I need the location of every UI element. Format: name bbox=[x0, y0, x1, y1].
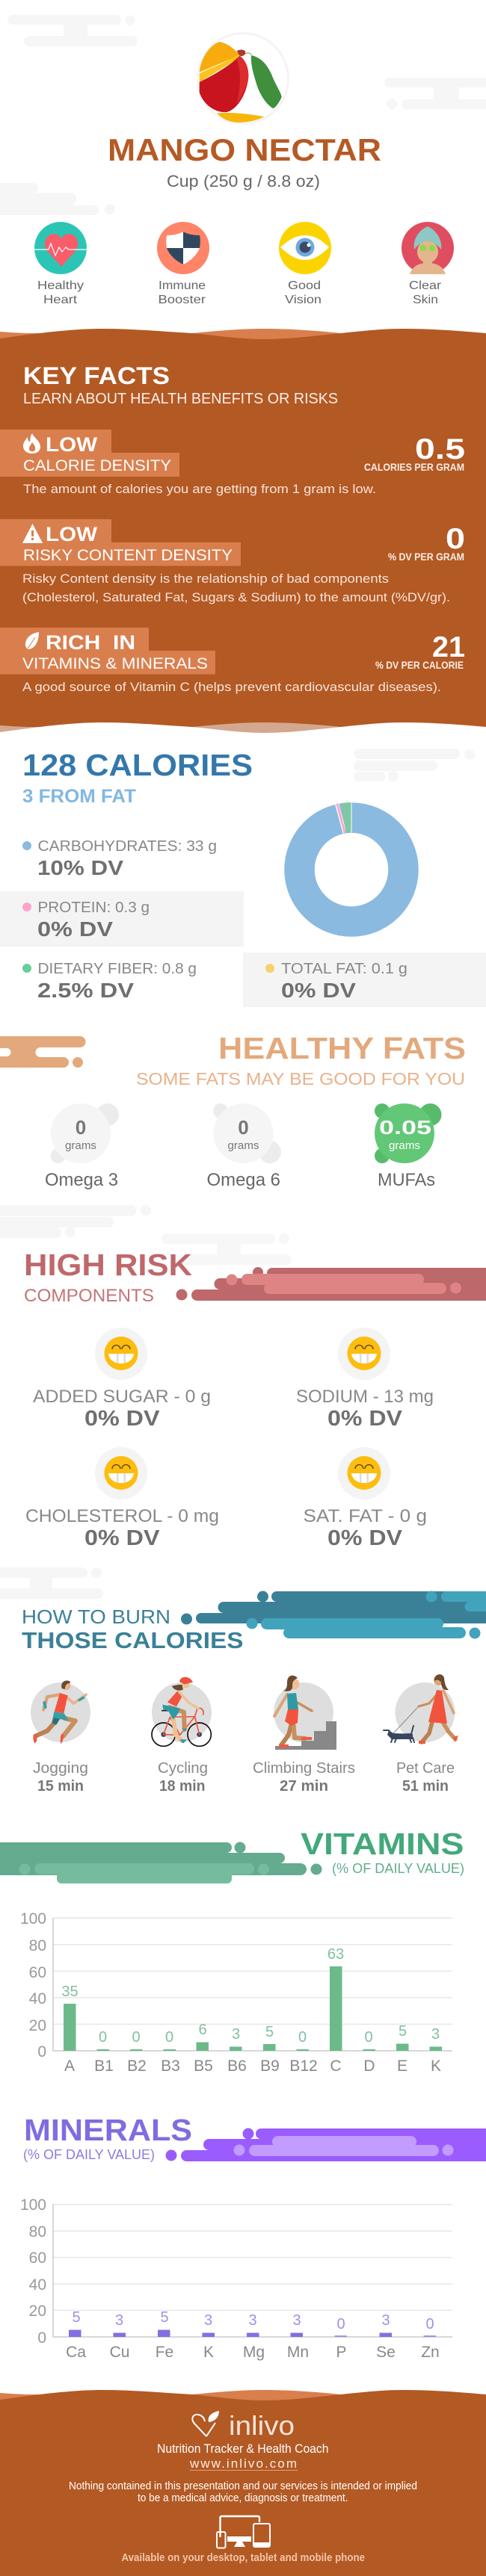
decoration: risk banner bbox=[176, 1267, 486, 1301]
panel: header bbox=[0, 15, 486, 306]
icon: mango bbox=[197, 33, 289, 124]
decoration: minerals banner bbox=[166, 2128, 486, 2161]
y axis labels bbox=[20, 2196, 46, 2347]
heading: minerals: MINERALS bbox=[24, 2113, 192, 2147]
icon: good vision bbox=[279, 222, 331, 274]
fat: omega 6 bbox=[206, 1103, 281, 1190]
subheading: vitamins: (% OF DAILY VALUE) bbox=[332, 1861, 464, 1876]
subheading: minerals: (% OF DAILY VALUE) bbox=[23, 2147, 155, 2162]
risk item: cholesterol: CHOLESTEROL - 0 mg bbox=[25, 1506, 219, 1526]
legend: total fat: 0% DV bbox=[281, 979, 356, 1002]
y axis labels: 100 bbox=[20, 1910, 46, 1928]
legend: dietary fiber: 2.5% DV bbox=[37, 979, 134, 1002]
fact: risky content density bbox=[0, 519, 465, 604]
x axis labels: B3 bbox=[161, 2058, 180, 2075]
fat: mufas: MUFAs bbox=[378, 1170, 435, 1190]
website: www.inlivo.com bbox=[189, 2456, 297, 2471]
value labels: 3 bbox=[115, 2312, 123, 2329]
heading: high risk: HIGH RISK bbox=[24, 1248, 192, 1282]
activity: climbing stairs: 27 min bbox=[280, 1778, 328, 1795]
panel: vitamins bbox=[0, 1827, 464, 2075]
description bbox=[22, 572, 450, 604]
y axis labels: 20 bbox=[29, 2303, 46, 2320]
value labels: 5 bbox=[399, 2023, 407, 2040]
x axis labels: Ca bbox=[66, 2344, 86, 2361]
legend: protein bbox=[0, 891, 244, 947]
legend: total fat bbox=[243, 953, 486, 1007]
description: The amount of calories you are getting from 1 gram is low. bbox=[23, 483, 376, 496]
decoration: burn banner bbox=[181, 1591, 486, 1639]
y axis labels bbox=[20, 1910, 46, 2061]
label: good vision bbox=[285, 279, 322, 306]
disclaimer bbox=[69, 2480, 417, 2504]
value labels: 3 bbox=[232, 2026, 240, 2043]
panel: high risk components bbox=[0, 1205, 486, 1550]
disclaimer: to be a medical advice, diagnosis or treatment. bbox=[138, 2492, 348, 2504]
logo: inlivo: inlivo bbox=[229, 2410, 295, 2441]
value labels: 3 bbox=[248, 2312, 257, 2329]
label: healthy heart bbox=[37, 279, 84, 306]
risk item: added sugar bbox=[33, 1328, 211, 1431]
x axis labels: Se bbox=[376, 2344, 396, 2361]
y axis labels: 60 bbox=[29, 2250, 46, 2267]
serving size: Cup (250 g / 8.8 oz) bbox=[167, 172, 320, 191]
cloud: top left bbox=[7, 15, 138, 46]
bars bbox=[64, 1966, 442, 2051]
risk item: cholesterol: 0% DV bbox=[84, 1526, 160, 1550]
icon: healthy heart bbox=[34, 222, 87, 274]
title: MANGO NECTAR bbox=[108, 132, 381, 167]
label: good vision: Good bbox=[288, 279, 321, 292]
risk item: saturated fat: SAT. FAT - 0 g bbox=[304, 1506, 427, 1526]
label: immune booster: Booster bbox=[159, 294, 206, 306]
availability note: Available on your desktop, tablet and mobile phone bbox=[121, 2552, 365, 2564]
value: 21 bbox=[432, 631, 465, 663]
value labels: 0 bbox=[425, 2316, 434, 2332]
label: clear skin: Skin bbox=[413, 294, 438, 306]
panel: healthy fats bbox=[0, 1031, 466, 1190]
activity: jogging: Jogging bbox=[33, 1760, 88, 1777]
value labels bbox=[61, 1946, 440, 2046]
value labels: 3 bbox=[204, 2312, 212, 2329]
value labels: 5 bbox=[265, 2024, 274, 2040]
fact name: VITAMINS & MINERALS bbox=[22, 655, 208, 672]
heading: those calories: THOSE CALORIES bbox=[22, 1627, 244, 1653]
cloud: risk left bbox=[0, 1205, 151, 1238]
activity: cycling bbox=[152, 1677, 212, 1795]
tagline: Nutrition Tracker & Health Coach bbox=[157, 2442, 329, 2456]
x axis labels: Mn bbox=[287, 2344, 309, 2361]
activity: pet care: Pet Care bbox=[396, 1760, 455, 1777]
value labels: 0 bbox=[132, 2029, 141, 2046]
x axis labels bbox=[66, 2344, 440, 2361]
risk item: cholesterol bbox=[25, 1447, 219, 1550]
label: healthy heart: Heart bbox=[43, 294, 78, 306]
fact: rich in vitamins bbox=[0, 628, 465, 694]
unit: % DV PER GRAM bbox=[388, 551, 464, 563]
y axis labels: 100 bbox=[20, 2196, 46, 2214]
x axis labels: E bbox=[397, 2058, 407, 2075]
x axis labels: Fe bbox=[156, 2344, 173, 2361]
activity: jogging: 15 min bbox=[37, 1778, 84, 1795]
y axis labels: 20 bbox=[29, 2017, 46, 2034]
cloud: mid left bbox=[0, 183, 115, 215]
wave: top bbox=[0, 329, 486, 736]
donut chart bbox=[299, 802, 404, 922]
x axis labels: A bbox=[64, 2058, 75, 2075]
disclaimer: Nothing contained in this presentation and our services is intended or implied bbox=[69, 2480, 417, 2492]
risk item: added sugar: ADDED SUGAR - 0 g bbox=[33, 1387, 211, 1407]
grid lines bbox=[53, 2205, 452, 2310]
risk item: saturated fat: 0% DV bbox=[327, 1526, 403, 1550]
value labels: 6 bbox=[198, 2022, 207, 2038]
cloud: burn bbox=[0, 1567, 103, 1599]
value: 0.5 bbox=[415, 433, 465, 465]
label: immune booster bbox=[159, 279, 206, 306]
grid lines bbox=[53, 1918, 452, 2024]
label: good vision: Vision bbox=[285, 294, 322, 306]
value labels bbox=[72, 2309, 434, 2332]
y axis labels: 40 bbox=[29, 1990, 46, 2007]
value labels: 0 bbox=[99, 2029, 107, 2046]
wave: bottom bbox=[0, 722, 486, 747]
fact name: CALORIE DENSITY bbox=[23, 457, 171, 474]
rating: RICH IN bbox=[46, 631, 135, 654]
legend: carbohydrates: CARBOHYDRATES: 33 g bbox=[37, 838, 217, 855]
fat: mufas: 0.05 bbox=[379, 1116, 431, 1139]
x axis labels bbox=[64, 2058, 441, 2075]
heading: how to burn: HOW TO BURN bbox=[22, 1606, 170, 1628]
bars bbox=[69, 2329, 436, 2337]
x axis labels: K bbox=[431, 2058, 441, 2075]
activity: pet care: 51 min bbox=[402, 1778, 449, 1795]
y axis labels: 0 bbox=[37, 2329, 46, 2347]
bar chart: minerals bbox=[20, 2196, 452, 2361]
x axis labels: Mg bbox=[243, 2344, 265, 2361]
x axis labels: B6 bbox=[227, 2058, 247, 2075]
description: (Cholesterol, Saturated Fat, Sugars & Sodium) to the amount (%DV/gr). bbox=[22, 591, 450, 604]
x axis labels: B5 bbox=[194, 2058, 213, 2075]
subheading: from fat: 3 FROM FAT bbox=[22, 786, 136, 807]
label: clear skin: Clear bbox=[409, 279, 442, 292]
risk item: sodium: 0% DV bbox=[327, 1407, 403, 1431]
activity: jogging bbox=[31, 1681, 90, 1795]
label: clear skin bbox=[409, 279, 442, 306]
heading: vitamins: VITAMINS bbox=[301, 1827, 464, 1861]
panel: minerals bbox=[20, 2113, 486, 2361]
risk item: added sugar: 0% DV bbox=[84, 1407, 160, 1431]
fat: omega 3: Omega 3 bbox=[45, 1170, 118, 1190]
value labels: 0 bbox=[298, 2029, 307, 2046]
value labels: 3 bbox=[292, 2312, 301, 2329]
decoration: fats banner bbox=[0, 1036, 86, 1068]
description: Risky Content density is the relationship of bad components bbox=[22, 572, 389, 586]
x axis labels: K bbox=[203, 2344, 214, 2361]
legend: protein: PROTEIN: 0.3 g bbox=[37, 900, 150, 916]
x axis labels: B1 bbox=[94, 2058, 114, 2075]
value labels: 35 bbox=[61, 1984, 79, 2000]
subheading: LEARN ABOUT HEALTH BENEFITS OR RISKS bbox=[23, 391, 338, 407]
risk item: sodium bbox=[296, 1328, 434, 1431]
fat: omega 6: grams bbox=[227, 1139, 259, 1152]
panel: how to burn bbox=[0, 1567, 486, 1795]
value labels: 0 bbox=[336, 2316, 345, 2332]
legend: carbohydrates bbox=[22, 838, 217, 879]
fat: omega 6: Omega 6 bbox=[206, 1170, 280, 1190]
x axis labels: C bbox=[330, 2058, 342, 2075]
panel: calories bbox=[0, 748, 486, 1007]
activity: cycling: 18 min bbox=[159, 1778, 205, 1795]
risk item: saturated fat bbox=[304, 1447, 427, 1550]
cloud: risk centre bbox=[162, 1233, 292, 1265]
x axis labels: D bbox=[363, 2058, 375, 2075]
fact name: RISKY CONTENT DENSITY bbox=[23, 547, 233, 564]
decoration: vitamins banner bbox=[0, 1842, 322, 1883]
heading: calories: 128 CALORIES bbox=[22, 748, 253, 782]
wave: footer bbox=[0, 2390, 486, 2576]
y axis labels: 0 bbox=[37, 2043, 46, 2061]
subheading: components: COMPONENTS bbox=[24, 1286, 154, 1306]
x axis labels: B12 bbox=[289, 2058, 318, 2075]
x axis labels: B9 bbox=[260, 2058, 280, 2075]
fat: omega 3: 0 bbox=[76, 1116, 86, 1139]
value labels: 5 bbox=[72, 2309, 81, 2326]
y axis labels: 40 bbox=[29, 2276, 46, 2294]
value labels: 5 bbox=[160, 2309, 169, 2326]
logo: inlivo bbox=[192, 2410, 295, 2441]
activity: cycling: Cycling bbox=[158, 1760, 208, 1777]
x axis labels: Cu bbox=[110, 2344, 129, 2361]
label: healthy heart: Healthy bbox=[37, 279, 84, 292]
y axis labels: 60 bbox=[29, 1964, 46, 1981]
heading: healthy fats: HEALTHY FATS bbox=[218, 1031, 466, 1065]
activity: pet care bbox=[384, 1674, 458, 1795]
panel: key facts bbox=[0, 329, 486, 747]
unit: % DV PER CALORIE bbox=[375, 660, 464, 671]
fact: calorie density bbox=[0, 430, 465, 496]
heading: key facts: KEY FACTS bbox=[23, 362, 170, 389]
fat: omega 3: grams bbox=[65, 1139, 96, 1152]
fat: omega 6: 0 bbox=[238, 1116, 249, 1139]
cloud: calories bbox=[354, 749, 475, 781]
icon: immune booster bbox=[157, 222, 209, 274]
icon: flame bbox=[23, 433, 40, 453]
legend: protein: 0% DV bbox=[37, 917, 113, 941]
cloud: top right bbox=[384, 78, 486, 109]
value labels: 3 bbox=[431, 2026, 440, 2043]
description: A good source of Vitamin C (helps prevent cardiovascular diseases). bbox=[22, 681, 441, 694]
legend: dietary fiber: DIETARY FIBER: 0.8 g bbox=[37, 961, 197, 977]
rating: LOW bbox=[46, 523, 98, 545]
x axis labels: P bbox=[336, 2344, 347, 2361]
x axis labels: B2 bbox=[127, 2058, 147, 2075]
activity: climbing stairs: Climbing Stairs bbox=[253, 1760, 355, 1777]
value: 0 bbox=[446, 523, 465, 555]
fat: mufas bbox=[375, 1103, 441, 1190]
risk item: sodium: SODIUM - 13 mg bbox=[296, 1387, 434, 1407]
legend: total fat: TOTAL FAT: 0.1 g bbox=[281, 961, 407, 977]
value labels: 0 bbox=[364, 2029, 373, 2046]
icon: leaf bbox=[25, 632, 39, 649]
icon: clear skin bbox=[402, 222, 454, 274]
y axis labels: 80 bbox=[29, 1937, 46, 1954]
rating: LOW bbox=[46, 433, 98, 456]
icon: devices bbox=[217, 2516, 270, 2548]
fat: mufas: grams bbox=[389, 1139, 420, 1152]
icon: warning bbox=[22, 524, 43, 543]
panel: footer bbox=[0, 2390, 486, 2576]
x axis labels: Zn bbox=[421, 2344, 440, 2361]
value labels: 0 bbox=[165, 2029, 173, 2046]
legend: carbohydrates: 10% DV bbox=[37, 856, 123, 879]
y axis labels: 80 bbox=[29, 2223, 46, 2241]
unit: CALORIES PER GRAM bbox=[364, 462, 464, 473]
activity: climbing stairs bbox=[253, 1676, 355, 1795]
subheading: fats: SOME FATS MAY BE GOOD FOR YOU bbox=[136, 1069, 465, 1089]
value labels: 63 bbox=[327, 1946, 344, 1963]
legend: dietary fiber bbox=[22, 961, 197, 1002]
fat: omega 3 bbox=[45, 1103, 119, 1190]
value labels: 3 bbox=[381, 2312, 390, 2329]
bar chart: vitamins bbox=[20, 1910, 452, 2075]
label: immune booster: Immune bbox=[159, 279, 206, 292]
